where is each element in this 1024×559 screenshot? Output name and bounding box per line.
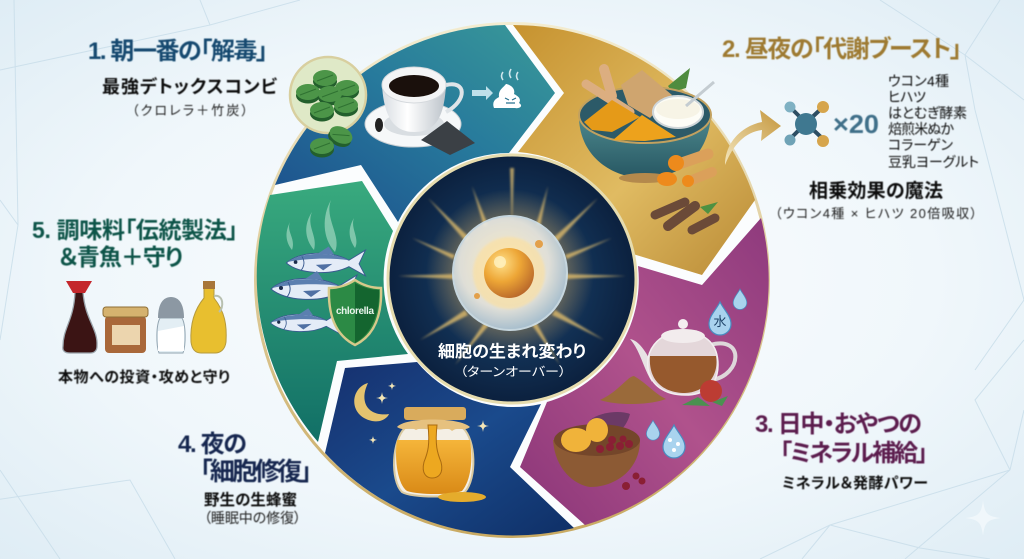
heading 3: 3. 日中・おやつの [755, 411, 922, 438]
subheading 2: 相乗効果の魔法 [809, 180, 943, 202]
white wheel base [257, 25, 767, 535]
heading 2: 2. 昼夜の「代謝ブースト」 [722, 35, 962, 63]
heading 1 [88, 38, 277, 118]
heading 4: （睡眠中の修復） [204, 510, 301, 526]
icon: curry bowl with turmeric [579, 68, 714, 183]
segment 5: green arrow [257, 181, 408, 442]
note 5: 本物への投資・攻めと守り [58, 368, 230, 386]
icon: soy sauce bottle [63, 281, 97, 353]
arrow: gold curved [725, 110, 781, 165]
icon: chlorella shield [329, 280, 381, 345]
ingredients list [888, 73, 979, 170]
heading 5 [32, 217, 238, 386]
subheading 3: ミネラル＆発酵パワー [782, 474, 928, 492]
note 4: 野生の生蜂蜜 [204, 490, 297, 509]
cell [453, 216, 567, 330]
icon: arrow to poop [472, 69, 521, 108]
icon: turmeric roots [657, 154, 712, 187]
heading 4 [178, 431, 312, 526]
heading 2 [722, 35, 979, 221]
circular process wheel [254, 22, 770, 538]
subheading 1: 最強デトックスコンビ [102, 76, 277, 97]
segment 4: navy arrow [325, 362, 574, 535]
icon: water drops [709, 289, 747, 335]
center caption: （ターンオーバー） [460, 365, 566, 379]
icon: oil bottle [191, 281, 226, 353]
icon: crescent moon and stars [354, 382, 489, 444]
icon: teapot with buckwheat [630, 319, 735, 406]
heading 3: 「ミネラル補給」 [780, 440, 928, 467]
icon: mineral drops [646, 420, 685, 458]
center caption [438, 342, 586, 379]
center caption: 細胞の生まれ変わり [438, 342, 586, 361]
light rays [398, 168, 626, 365]
note 1: （クロレラ＋竹炭） [132, 103, 248, 118]
heading 1: 1. 朝一番の「解毒」 [88, 38, 268, 65]
sparkle watermark [966, 501, 1000, 535]
ingredients list: 豆乳ヨーグルト [888, 154, 979, 170]
icon: water drops: 水 [713, 314, 727, 329]
heading 5: ＆青魚＋守り [59, 244, 183, 270]
note 2: （ウコン4種 × ヒハツ 20倍吸収） [775, 206, 977, 221]
segment 3: purple arrow [520, 218, 769, 525]
heading 5: 5. 調味料「伝統製法」 [32, 217, 238, 243]
icon: honey jar [394, 407, 486, 502]
icon: sweet potato bowl [553, 412, 646, 490]
icon: steam [286, 200, 356, 252]
ingredients list: コラーゲン [888, 137, 953, 153]
segment 2: gold arrow [513, 25, 755, 275]
ingredients list: 焙煎米ぬか [888, 121, 954, 137]
ingredients list: ヒハツ [888, 89, 926, 105]
icon: miso jar [103, 307, 148, 353]
ingredients list: ウコン4種 [888, 73, 949, 89]
center circle: cell turnover [388, 155, 636, 403]
icon: buckwheat pile [600, 376, 666, 404]
icon: fish [271, 246, 365, 334]
icon: chlorella tablets [290, 57, 366, 158]
icon: molecule [784, 101, 829, 147]
gold outer rim [254, 22, 770, 538]
icon: salt shaker [157, 297, 185, 353]
heading 3 [755, 411, 928, 492]
icon: chlorella shield: chlorella [336, 306, 374, 317]
icon: hihatsu pepper [655, 202, 718, 230]
ingredients list: はとむぎ酵素 [888, 105, 967, 121]
heading 4: 「細胞修復」 [200, 458, 312, 486]
icon: coffee cup with charcoal [365, 67, 475, 155]
multiplier: ×20 [833, 109, 879, 139]
segment 1: blue teal arrow [275, 25, 555, 222]
heading 4: 4. 夜の [178, 431, 247, 458]
